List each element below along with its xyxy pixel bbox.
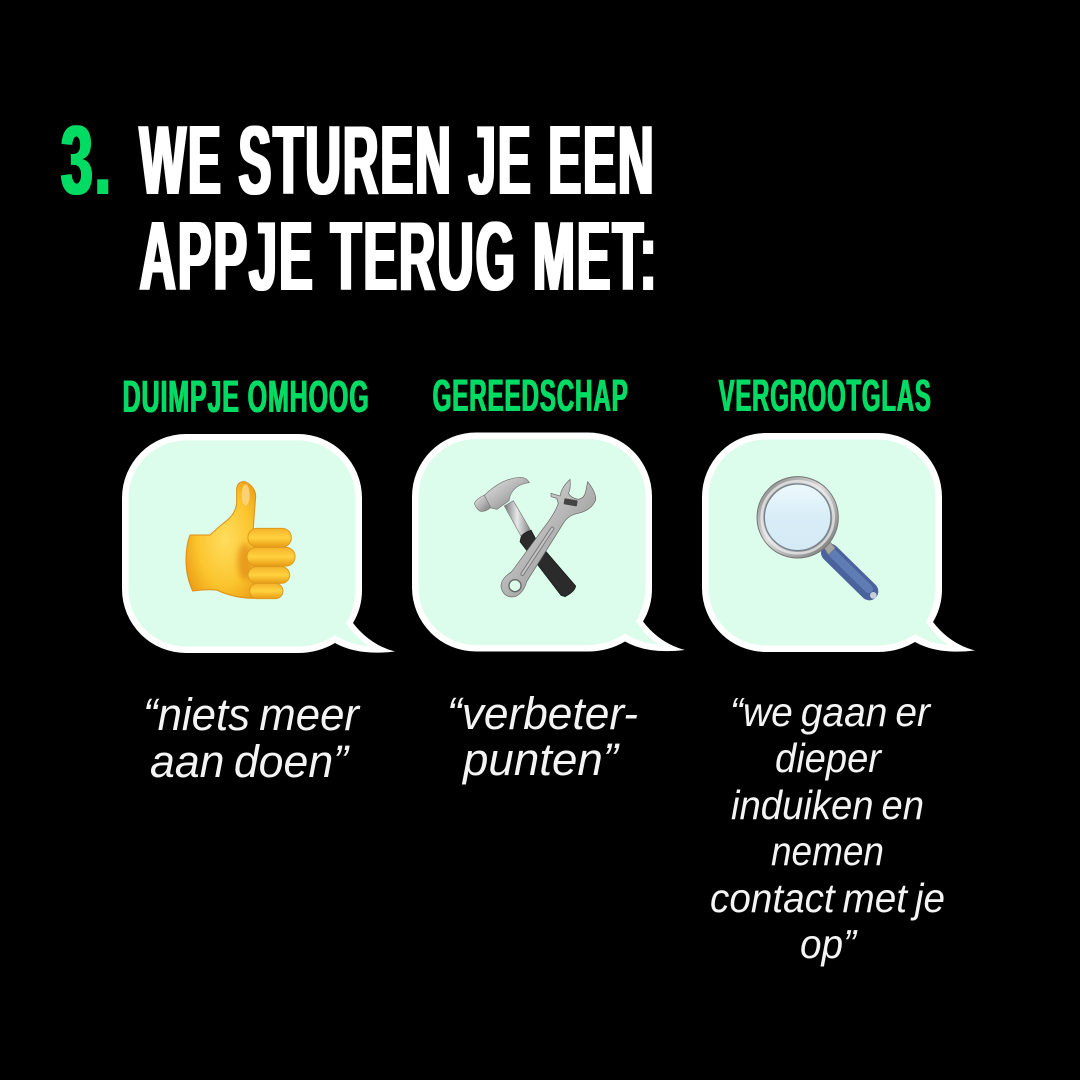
panel: vergrootglas xyxy=(702,370,975,967)
icon: magnifying glass xyxy=(757,477,877,599)
quote xyxy=(710,689,945,967)
panel: gereedschap xyxy=(412,370,685,785)
quote xyxy=(143,689,361,787)
title xyxy=(61,105,658,311)
speech bubble xyxy=(412,432,685,652)
heading: GEREEDSCHAP xyxy=(433,370,629,421)
quote: “niets meer xyxy=(143,689,361,740)
quote: “we gaan er xyxy=(730,689,932,735)
quote: punten” xyxy=(461,734,620,785)
speech bubble xyxy=(702,433,975,652)
icon: hammer and wrench xyxy=(474,477,596,597)
panel: duimpje omhoog xyxy=(122,371,395,787)
quote: dieper xyxy=(775,735,883,781)
quote: aan doen” xyxy=(150,736,350,787)
quote: nemen xyxy=(771,828,884,874)
quote: contact met je xyxy=(710,875,945,921)
icon: thumbs up xyxy=(186,482,295,599)
quote: op” xyxy=(800,921,858,967)
quote: “verbeter- xyxy=(447,688,638,739)
quote: induiken en xyxy=(731,782,924,828)
heading: DUIMPJE OMHOOG xyxy=(123,371,370,422)
speech bubble xyxy=(122,434,395,653)
quote xyxy=(447,688,638,785)
step number: 3. xyxy=(61,105,113,215)
